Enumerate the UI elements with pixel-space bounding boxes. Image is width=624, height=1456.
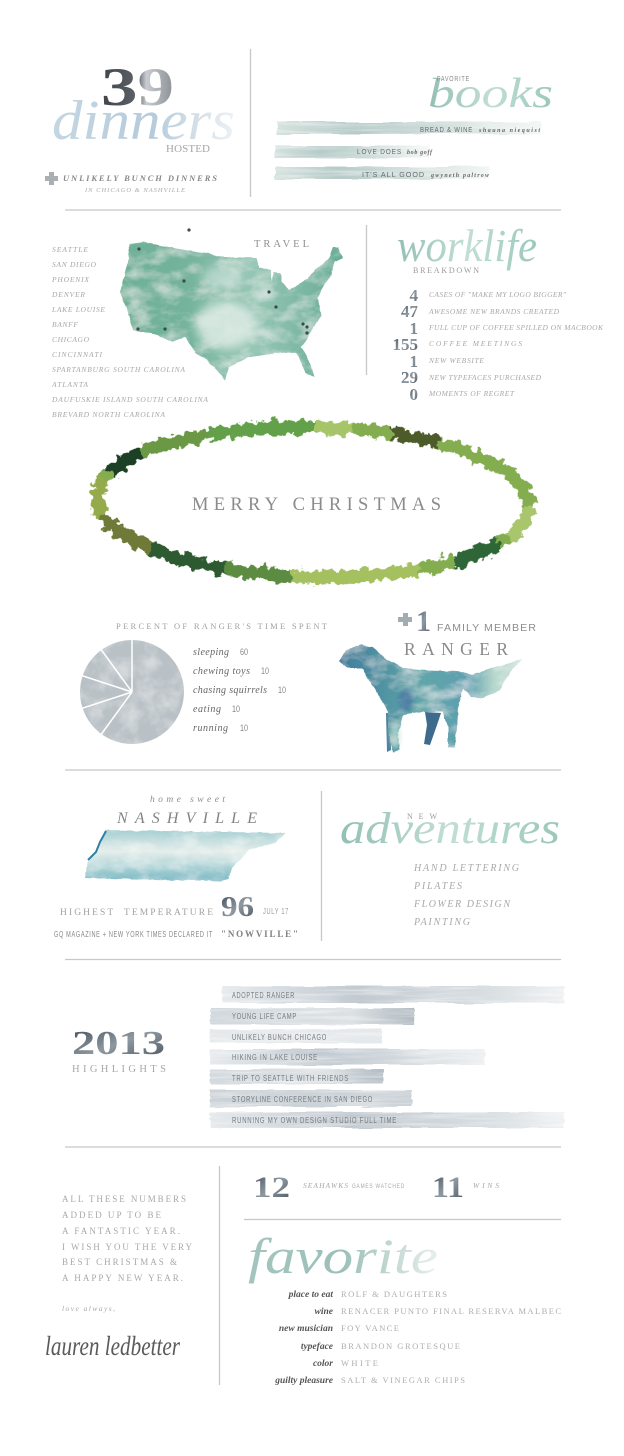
panel: dinners hosted (45, 57, 235, 194)
script word: adventures: adventures (340, 804, 560, 853)
favorites table: ROLF & DAUGHTERS (341, 1289, 447, 1299)
city list: LAKE LOUISE (51, 305, 105, 314)
breakdown labels: CASES OF "MAKE MY LOGO BIGGER" (429, 290, 567, 299)
city list: BANFF (52, 320, 78, 329)
text block: message (62, 1194, 192, 1283)
city list: DENVER (51, 290, 85, 299)
label: seahawks: SEAHAWKS (303, 1181, 348, 1190)
heading: new: NEW (407, 812, 437, 821)
heading: highlights: HIGHLIGHTS (72, 1064, 166, 1075)
highlight labels: RUNNING MY OWN DESIGN STUDIO FULL TIME (232, 1116, 397, 1125)
label: highest temperature: HIGHEST TEMPERATURE (60, 908, 213, 918)
icon: plus (45, 172, 58, 185)
pie chart (80, 638, 184, 744)
numbers column: 4 (410, 286, 418, 305)
illustration: dog (339, 645, 522, 752)
favorites table: new musician (279, 1324, 333, 1334)
pie legend: 10 (261, 666, 269, 676)
city list: CHICAGO (52, 335, 90, 344)
text block: message: I WISH YOU THE VERY (62, 1242, 192, 1252)
numbers column: 0 (410, 385, 418, 404)
breakdown labels: COFFEE MEETINGS (429, 339, 522, 348)
breakdown labels: MOMENTS OF REGRET (428, 389, 515, 398)
book: bread and wine: BREAD & WINE (420, 125, 473, 134)
brush bars (275, 122, 541, 179)
numbers column: 1 (410, 352, 418, 371)
pie legend: 10 (278, 685, 286, 695)
highlight labels (232, 991, 397, 1125)
book: bread and wine (420, 125, 540, 134)
brush bars (210, 986, 564, 1128)
favorites table: WHITE (341, 1358, 378, 1368)
numbers column: 29 (401, 368, 418, 387)
label: unlikely bunch dinners: UNLIKELY BUNCH DINNERS (63, 173, 217, 183)
panel: favorites (248, 1228, 561, 1386)
numbers column: 47 (401, 302, 418, 321)
text block: message: ALL THESE NUMBERS (62, 1194, 186, 1204)
highlight labels: STORYLINE CONFERENCE IN SAN DIEGO (232, 1095, 373, 1104)
icon: plus (398, 613, 412, 626)
breakdown labels: NEW TYPEFACES PURCHASED (428, 373, 542, 382)
adventures list (413, 863, 519, 928)
map: tennessee (85, 830, 286, 881)
text block: message: A FANTASTIC YEAR. (62, 1226, 180, 1236)
script word: worklife: worklife (397, 220, 537, 271)
script word: books: books (428, 71, 553, 117)
wreath: merry christmas (95, 422, 531, 582)
number: 2013: 2013 (72, 1025, 165, 1062)
heading: breakdown: BREAKDOWN (413, 266, 479, 275)
number: 12: 12 (253, 1171, 290, 1204)
panel: seahawks (253, 1171, 499, 1204)
book: it's all good: IT'S ALL GOOD (362, 170, 425, 179)
number: 1: 1 (416, 605, 431, 638)
heading: travel: TRAVEL (254, 239, 309, 250)
favorites table (274, 1289, 561, 1386)
number: 39: 39 (101, 57, 174, 117)
favorites table: typeface (301, 1342, 334, 1352)
heading: favorite: FAVORITE (437, 76, 470, 83)
heading: nashville: NASHVILLE (116, 810, 257, 827)
text block: message: BEST CHRISTMAS & (62, 1257, 177, 1267)
numbers column: 1 (410, 319, 418, 338)
label: nowville: "NOWVILLE" (221, 929, 298, 939)
breakdown labels: NEW WEBSITE (428, 356, 484, 365)
favorites table: SALT & VINEGAR CHIPS (341, 1375, 465, 1385)
label: july 17: JULY 17 (263, 907, 289, 916)
pie legend: sleeping (193, 647, 229, 658)
favorites table: guilty pleasure (274, 1376, 334, 1386)
pie legend: eating (193, 704, 221, 715)
city list: PHOENIX (51, 275, 89, 284)
book: it's all good (362, 170, 490, 179)
pie legend: 10 (240, 723, 248, 733)
city list: CINCINNATI (52, 350, 102, 359)
city list: DAUFUSKIE ISLAND SOUTH CAROLINA (51, 395, 208, 404)
numbers column (392, 286, 418, 404)
book: love does (357, 147, 433, 156)
script word: dinners: dinners (52, 90, 235, 152)
highlight labels: ADOPTED RANGER (232, 991, 295, 1000)
book: bread and wine: shauna niequist (478, 128, 540, 134)
breakdown labels (428, 290, 604, 398)
label: wins: WINS (473, 1181, 499, 1190)
city list: BREVARD NORTH CAROLINA (52, 410, 165, 419)
favorites table: wine (315, 1307, 334, 1317)
favorites table: FOY VANCE (341, 1323, 399, 1333)
panel: ranger family member (339, 605, 537, 752)
subheading: home sweet: home sweet (150, 795, 225, 805)
book: it's all good: gwyneth paltrow (430, 173, 490, 179)
heading: hosted: HOSTED (166, 143, 210, 155)
adventures list: HAND LETTERING (413, 863, 519, 874)
script word: favorite: favorite (248, 1228, 438, 1284)
breakdown labels: FULL CUP OF COFFEE SPILLED ON MACBOOK (428, 323, 604, 332)
number: 96: 96 (221, 892, 254, 923)
adventures list: PILATES (413, 881, 462, 892)
panel: favorite books (275, 71, 553, 179)
highlight labels: YOUNG LIFE CAMP (232, 1012, 297, 1021)
favorites table: place to eat (288, 1290, 333, 1300)
panel: new adventures (340, 804, 560, 928)
pie legend: chewing toys (193, 666, 250, 677)
map: united states watercolor (120, 228, 343, 380)
city list: ATLANTA (51, 380, 88, 389)
city list: SPARTANBURG SOUTH CAROLINA (52, 365, 185, 374)
pie legend (193, 647, 286, 734)
favorites table: RENACER PUNTO FINAL RESERVA MALBEC (341, 1306, 561, 1316)
city list: SAN DIEGO (52, 260, 97, 269)
panel: worklife breakdown (392, 220, 604, 404)
number: 11: 11 (432, 1171, 464, 1204)
pie legend: chasing squirrels (193, 685, 267, 696)
heading: merry christmas: MERRY CHRISTMAS (192, 495, 441, 515)
highlight labels: TRIP TO SEATTLE WITH FRIENDS (232, 1074, 349, 1083)
panel: 2013 highlights (72, 986, 564, 1128)
heading: percent of ranger's time spent: PERCENT OF RANGER'S TIME SPENT (116, 621, 328, 631)
adventures list: PAINTING (413, 917, 470, 928)
book: love does: bob goff (407, 150, 433, 156)
pie legend: 10 (232, 704, 240, 714)
panel: ranger's time (80, 621, 328, 744)
label: games watched: GAMES WATCHED (352, 1184, 405, 1190)
text block: message: ADDED UP TO BE (62, 1210, 162, 1220)
panel: closing message (45, 1194, 192, 1361)
numbers column: 155 (392, 335, 418, 354)
breakdown labels: AWESOME NEW BRANDS CREATED (428, 307, 560, 316)
highlight labels: UNLIKELY BUNCH CHICAGO (232, 1033, 327, 1042)
city list: SEATTLE (52, 245, 88, 254)
favorites table: color (313, 1359, 333, 1369)
book: love does: LOVE DOES (357, 147, 402, 156)
panel: nashville (54, 795, 298, 939)
label: gq magazine and new york times: GQ MAGAZINE + NEW YORK TIMES DECLARED IT (54, 929, 213, 939)
signature: lauren ledbetter (45, 1331, 180, 1361)
label: family member: FAMILY MEMBER (437, 622, 537, 634)
label: love always: love always, (62, 1304, 115, 1313)
adventures list: FLOWER DESIGN (413, 899, 511, 910)
panel: travel (51, 228, 343, 419)
text block: message: A HAPPY NEW YEAR. (62, 1273, 183, 1283)
highlight labels: HIKING IN LAKE LOUISE (232, 1053, 318, 1062)
heading: ranger: RANGER (404, 639, 508, 659)
favorites table: BRANDON GROTESQUE (341, 1341, 460, 1351)
pie legend: running (193, 723, 228, 734)
label: in chicago and nashville: IN CHICAGO & NASHVILLE (84, 187, 185, 194)
city list (51, 245, 208, 419)
pie legend: 60 (240, 647, 248, 657)
